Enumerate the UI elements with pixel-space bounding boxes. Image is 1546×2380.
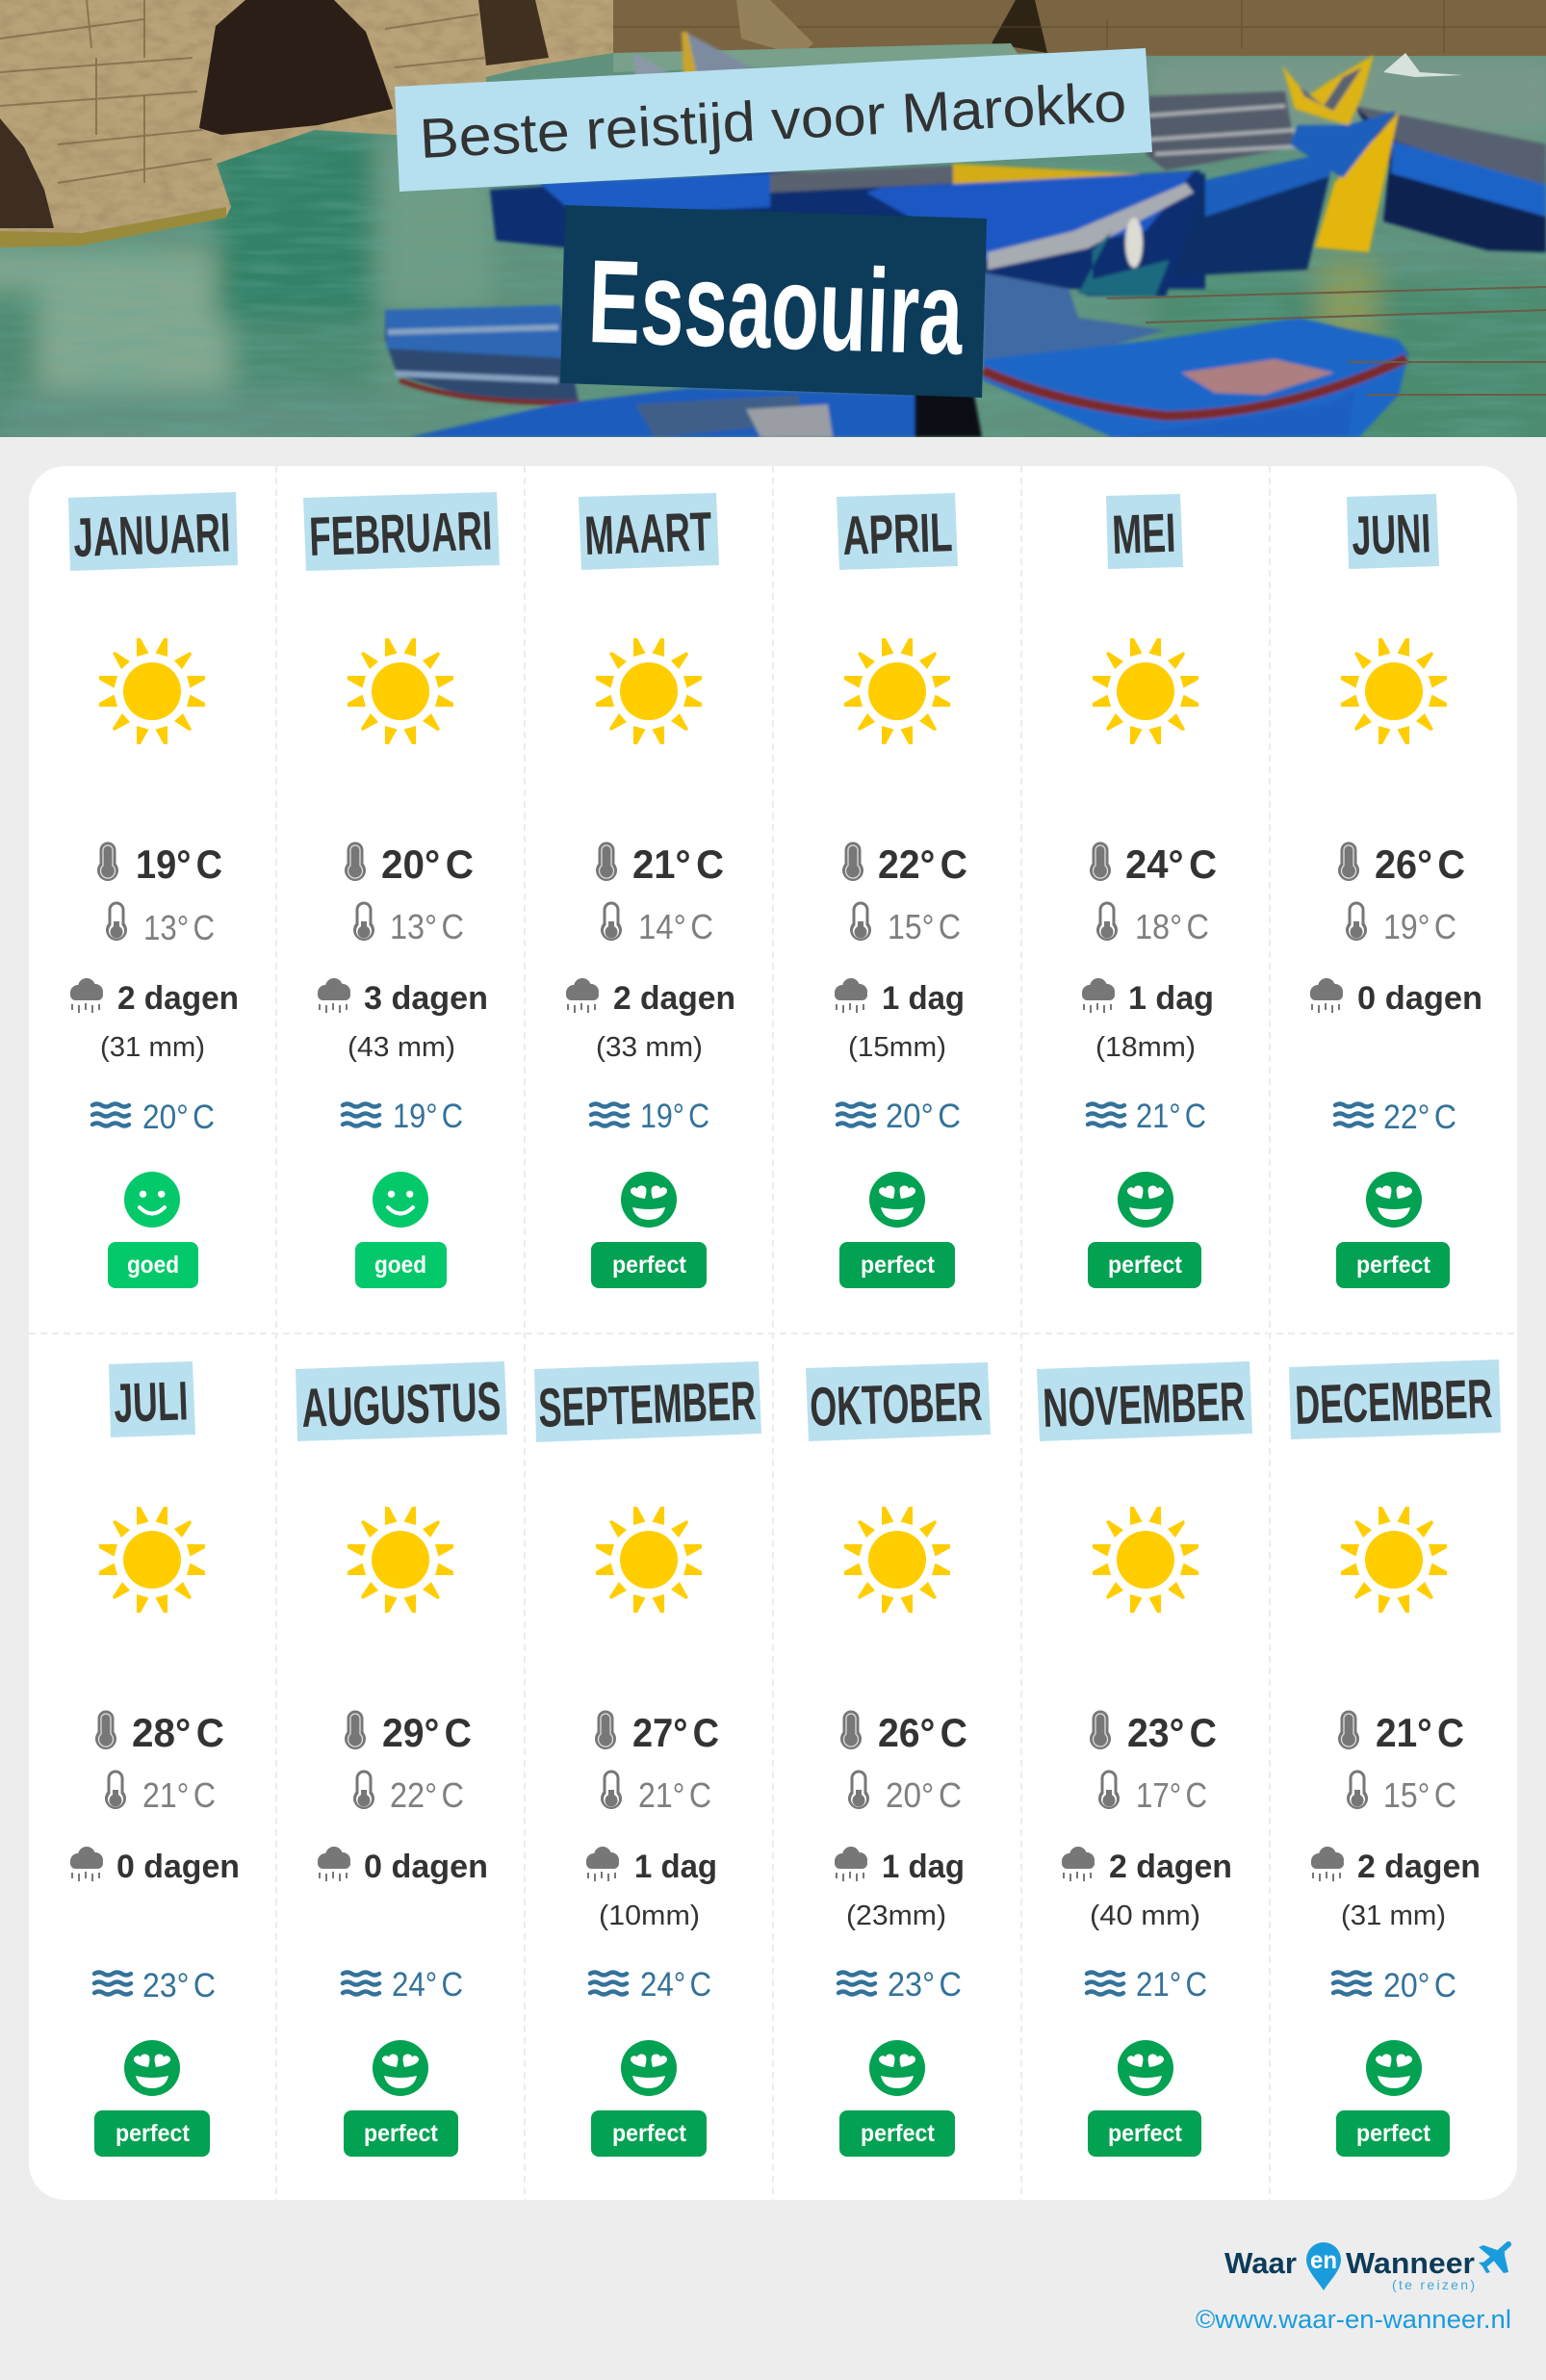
panel: november: [1037, 1361, 1252, 2157]
logo: Waar en Wanneer: Wanneer: [1346, 2246, 1475, 2280]
month label: NOVEMBER: [1042, 1371, 1246, 1439]
icon: sun: [348, 1507, 453, 1613]
icon: rain cloud: [318, 978, 350, 1013]
rating badge: perfect: [1108, 2120, 1183, 2147]
rain days: 1 dag: [882, 980, 965, 1017]
rating badge: goed: [127, 1252, 179, 1279]
rating badge: perfect: [612, 2120, 687, 2147]
rating badge: perfect: [612, 1252, 687, 1279]
month label: JULI: [113, 1370, 189, 1435]
panel: september: [534, 1361, 761, 2157]
min temperature: 15° C: [1383, 1775, 1456, 1815]
icon: smiley good: [124, 1172, 180, 1228]
month label: FEBRUARI: [308, 500, 493, 568]
icon: thermometer low: [105, 1770, 126, 1809]
icon: thermometer high: [345, 1710, 366, 1749]
icon: smiley perfect: [1366, 2040, 1422, 2096]
panel: mei: [1082, 494, 1217, 1288]
max temperature: 21° C: [632, 841, 724, 887]
min temperature: 21° C: [638, 1775, 711, 1815]
icon: sun: [348, 638, 453, 744]
icon: smiley perfect: [1366, 1172, 1422, 1228]
sea temperature: 21° C: [1136, 1098, 1206, 1135]
panel: januari: [68, 492, 239, 1288]
icon: thermometer low: [601, 901, 622, 941]
rainfall: (31 mm): [100, 1032, 205, 1063]
heading banner: Beste reistijd voor Marokko: [395, 48, 1152, 192]
rainfall: (23mm): [846, 1901, 946, 1931]
logo: Waar en Wanneer: (te reizen): [1392, 2277, 1475, 2292]
icon: smiley perfect: [869, 2040, 925, 2096]
icon: waves: [1335, 1103, 1372, 1126]
icon: rain cloud: [1082, 978, 1115, 1013]
icon: smiley perfect: [1118, 1172, 1173, 1228]
rating badge: goed: [374, 1252, 426, 1279]
icon: sun: [844, 1507, 950, 1613]
sea temperature: 20° C: [1383, 1967, 1456, 2005]
icon: rain cloud: [566, 978, 599, 1013]
icon: smiley perfect: [124, 2040, 180, 2096]
panel: month grid card: [29, 466, 1517, 2200]
month label: JANUARI: [72, 502, 231, 569]
icon: thermometer low: [106, 901, 127, 941]
rating badge: [344, 2110, 458, 2157]
max temperature: 19° C: [136, 841, 222, 887]
rainfall: (18mm): [1095, 1032, 1196, 1063]
rating badge: perfect: [116, 2120, 191, 2147]
icon: sun: [1341, 638, 1447, 744]
icon: sun: [99, 638, 205, 744]
icon: thermometer high: [95, 1710, 116, 1749]
rain days: 2 dagen: [613, 980, 735, 1017]
icon: thermometer low: [1347, 1770, 1368, 1809]
rain days: 0 dagen: [1357, 980, 1482, 1017]
icon: waves: [343, 1972, 379, 1995]
rain days: 3 dagen: [364, 980, 488, 1017]
sea temperature: 21° C: [1136, 1966, 1207, 2004]
max temperature: 26° C: [1375, 841, 1465, 887]
icon: sun: [596, 1507, 702, 1613]
icon: waves: [1333, 1972, 1370, 1995]
month label: [837, 493, 958, 570]
month label: [534, 1361, 761, 1442]
logo: Waar en Wanneer: [1224, 2242, 1508, 2292]
sea temperature: 23° C: [888, 1966, 962, 2004]
icon: sun: [844, 638, 950, 744]
icon: sun: [1093, 1507, 1198, 1613]
month label: MAART: [583, 501, 712, 567]
min temperature: 19° C: [1383, 907, 1456, 946]
rating badge: [94, 2110, 210, 2157]
rain days: 2 dagen: [117, 980, 239, 1017]
icon: sun: [99, 1507, 205, 1613]
rating badge: [591, 1242, 707, 1288]
max temperature: 22° C: [878, 841, 967, 887]
max temperature: 27° C: [632, 1710, 719, 1755]
icon: waves: [591, 1103, 628, 1126]
icon: thermometer high: [97, 841, 118, 881]
rain days: 0 dagen: [116, 1849, 240, 1885]
icon: map pin: [1306, 2242, 1341, 2290]
icon: waves: [1088, 1103, 1124, 1126]
icon: rain cloud: [1310, 978, 1343, 1013]
rain days: 2 dagen: [1109, 1849, 1232, 1885]
rating badge: [108, 1242, 198, 1288]
month label: [296, 1361, 507, 1441]
icon: waves: [94, 1972, 131, 1995]
month label: [1037, 1361, 1252, 1441]
icon: thermometer low: [601, 1770, 622, 1809]
max temperature: 20° C: [381, 841, 474, 887]
month label: OKTOBER: [809, 1371, 983, 1438]
month label: [1347, 494, 1439, 569]
rating badge: [1088, 1242, 1201, 1288]
icon: thermometer low: [353, 901, 374, 941]
rating badge: perfect: [861, 1252, 936, 1279]
rating badge: [839, 2110, 955, 2157]
month label: [579, 493, 719, 570]
rainfall: (40 mm): [1090, 1901, 1200, 1931]
month label: JUNI: [1351, 503, 1431, 567]
hero photo: boats in Essaouira harbour: [0, 0, 1546, 462]
min temperature: 17° C: [1136, 1775, 1207, 1815]
max temperature: 28° C: [132, 1710, 224, 1755]
rainfall: (43 mm): [348, 1032, 455, 1063]
rating badge: [1088, 2110, 1201, 2157]
sea temperature: 24° C: [392, 1966, 463, 2004]
copyright url: ©www.waar-en-wanneer.nl: [1196, 2305, 1511, 2334]
min temperature: 22° C: [390, 1775, 464, 1815]
icon: rain cloud: [70, 1847, 103, 1881]
title banner: Essaouira: Essaouira: [586, 236, 966, 380]
min temperature: 18° C: [1135, 907, 1209, 946]
rainfall: (15mm): [848, 1032, 946, 1063]
rating badge: perfect: [1108, 1252, 1183, 1279]
rain days: 2 dagen: [1357, 1849, 1481, 1885]
icon: waves: [1087, 1972, 1123, 1995]
icon: rain cloud: [586, 1847, 619, 1881]
rain days: 1 dag: [1128, 980, 1214, 1017]
min temperature: 13° C: [390, 907, 464, 946]
icon: thermometer high: [1338, 841, 1359, 881]
icon: thermometer high: [842, 841, 863, 881]
sea temperature: 19° C: [393, 1098, 463, 1135]
month label: SEPTEMBER: [537, 1370, 757, 1439]
icon: waves: [590, 1972, 627, 1995]
panel: februari: [303, 492, 500, 1288]
min temperature: 14° C: [638, 907, 713, 946]
icon: smiley perfect: [869, 1172, 925, 1228]
icon: rain cloud: [835, 978, 867, 1013]
icon: waves: [92, 1103, 129, 1126]
rating badge: perfect: [861, 2120, 936, 2147]
rating badge: [1336, 2110, 1450, 2157]
max temperature: 24° C: [1125, 841, 1217, 887]
month label: AUGUSTUS: [300, 1371, 502, 1439]
icon: rain cloud: [70, 978, 103, 1013]
max temperature: 23° C: [1127, 1710, 1217, 1755]
icon: sun: [1093, 638, 1198, 744]
icon: waves: [838, 1972, 875, 1995]
icon: waves: [343, 1103, 379, 1126]
icon: airplane: [1479, 2244, 1508, 2273]
rainfall: (33 mm): [596, 1032, 703, 1063]
month label: [1106, 494, 1183, 569]
panel: oktober: [806, 1362, 991, 2157]
month label: [68, 492, 238, 571]
max temperature: 21° C: [1376, 1710, 1464, 1755]
icon: thermometer high: [1090, 1710, 1111, 1749]
panel: augustus: [296, 1361, 507, 2157]
icon: sun: [1341, 1507, 1447, 1613]
icon: thermometer high: [1090, 841, 1111, 881]
rating badge: perfect: [364, 2120, 439, 2147]
rating badge: [591, 2110, 707, 2157]
sea temperature: 22° C: [1383, 1099, 1456, 1136]
rain days: 0 dagen: [364, 1849, 488, 1885]
month label: [109, 1361, 195, 1437]
sea temperature: 23° C: [142, 1967, 216, 2005]
icon: thermometer high: [840, 1710, 862, 1749]
panel: maart: [566, 493, 735, 1288]
icon: smiley perfect: [373, 2040, 428, 2096]
rainfall: (31 mm): [1341, 1901, 1446, 1931]
icon: rain cloud: [835, 1847, 867, 1881]
rating badge: [355, 1242, 447, 1288]
sea temperature: 19° C: [640, 1098, 709, 1135]
month label: APRIL: [841, 502, 953, 567]
icon: thermometer low: [1098, 1770, 1120, 1809]
max temperature: 26° C: [878, 1710, 967, 1755]
month label: [806, 1362, 991, 1441]
icon: thermometer high: [595, 1710, 616, 1749]
panel: december: [1289, 1359, 1501, 2157]
sea temperature: 24° C: [640, 1966, 711, 2004]
min temperature: 20° C: [886, 1775, 962, 1815]
icon: smiley perfect: [621, 2040, 677, 2096]
panel: juli: [70, 1361, 240, 2157]
panel: april: [835, 493, 967, 1288]
icon: smiley perfect: [621, 1172, 677, 1228]
min temperature: 13° C: [143, 908, 215, 947]
sea temperature: 20° C: [886, 1098, 961, 1135]
icon: thermometer low: [1096, 901, 1118, 941]
month label: MEI: [1111, 503, 1176, 566]
heading banner: Beste reistijd voor Marokko: Beste reistijd voor Marokko: [418, 71, 1128, 170]
min temperature: 21° C: [142, 1775, 216, 1815]
icon: thermometer low: [850, 901, 871, 941]
icon: thermometer high: [345, 841, 366, 881]
min temperature: 15° C: [888, 907, 961, 946]
logo: Waar en Wanneer: Waar: [1224, 2246, 1297, 2280]
logo: Waar en Wanneer: en: [1310, 2247, 1337, 2274]
icon: sun: [596, 638, 702, 744]
icon: thermometer low: [848, 1770, 869, 1809]
rating badge: perfect: [1356, 1252, 1431, 1279]
title banner: Essaouira: [560, 205, 987, 398]
rating badge: [1336, 1242, 1450, 1288]
month label: [303, 492, 500, 571]
icon: thermometer low: [1346, 901, 1367, 941]
icon: smiley perfect: [1118, 2040, 1173, 2096]
rating badge: [839, 1242, 955, 1288]
icon: thermometer high: [596, 841, 617, 881]
rain days: 1 dag: [882, 1849, 965, 1885]
rating badge: perfect: [1356, 2120, 1431, 2147]
panel: juni: [1310, 494, 1482, 1288]
icon: thermometer low: [353, 1770, 374, 1809]
icon: rain cloud: [1062, 1847, 1095, 1881]
icon: waves: [837, 1103, 874, 1126]
sea temperature: 20° C: [142, 1099, 215, 1136]
max temperature: 29° C: [382, 1710, 472, 1755]
rain days: 1 dag: [634, 1849, 717, 1885]
icon: rain cloud: [1311, 1847, 1344, 1881]
icon: rain cloud: [318, 1847, 350, 1881]
icon: thermometer high: [1338, 1710, 1359, 1749]
rainfall: (10mm): [599, 1901, 700, 1931]
icon: smiley good: [373, 1172, 428, 1228]
